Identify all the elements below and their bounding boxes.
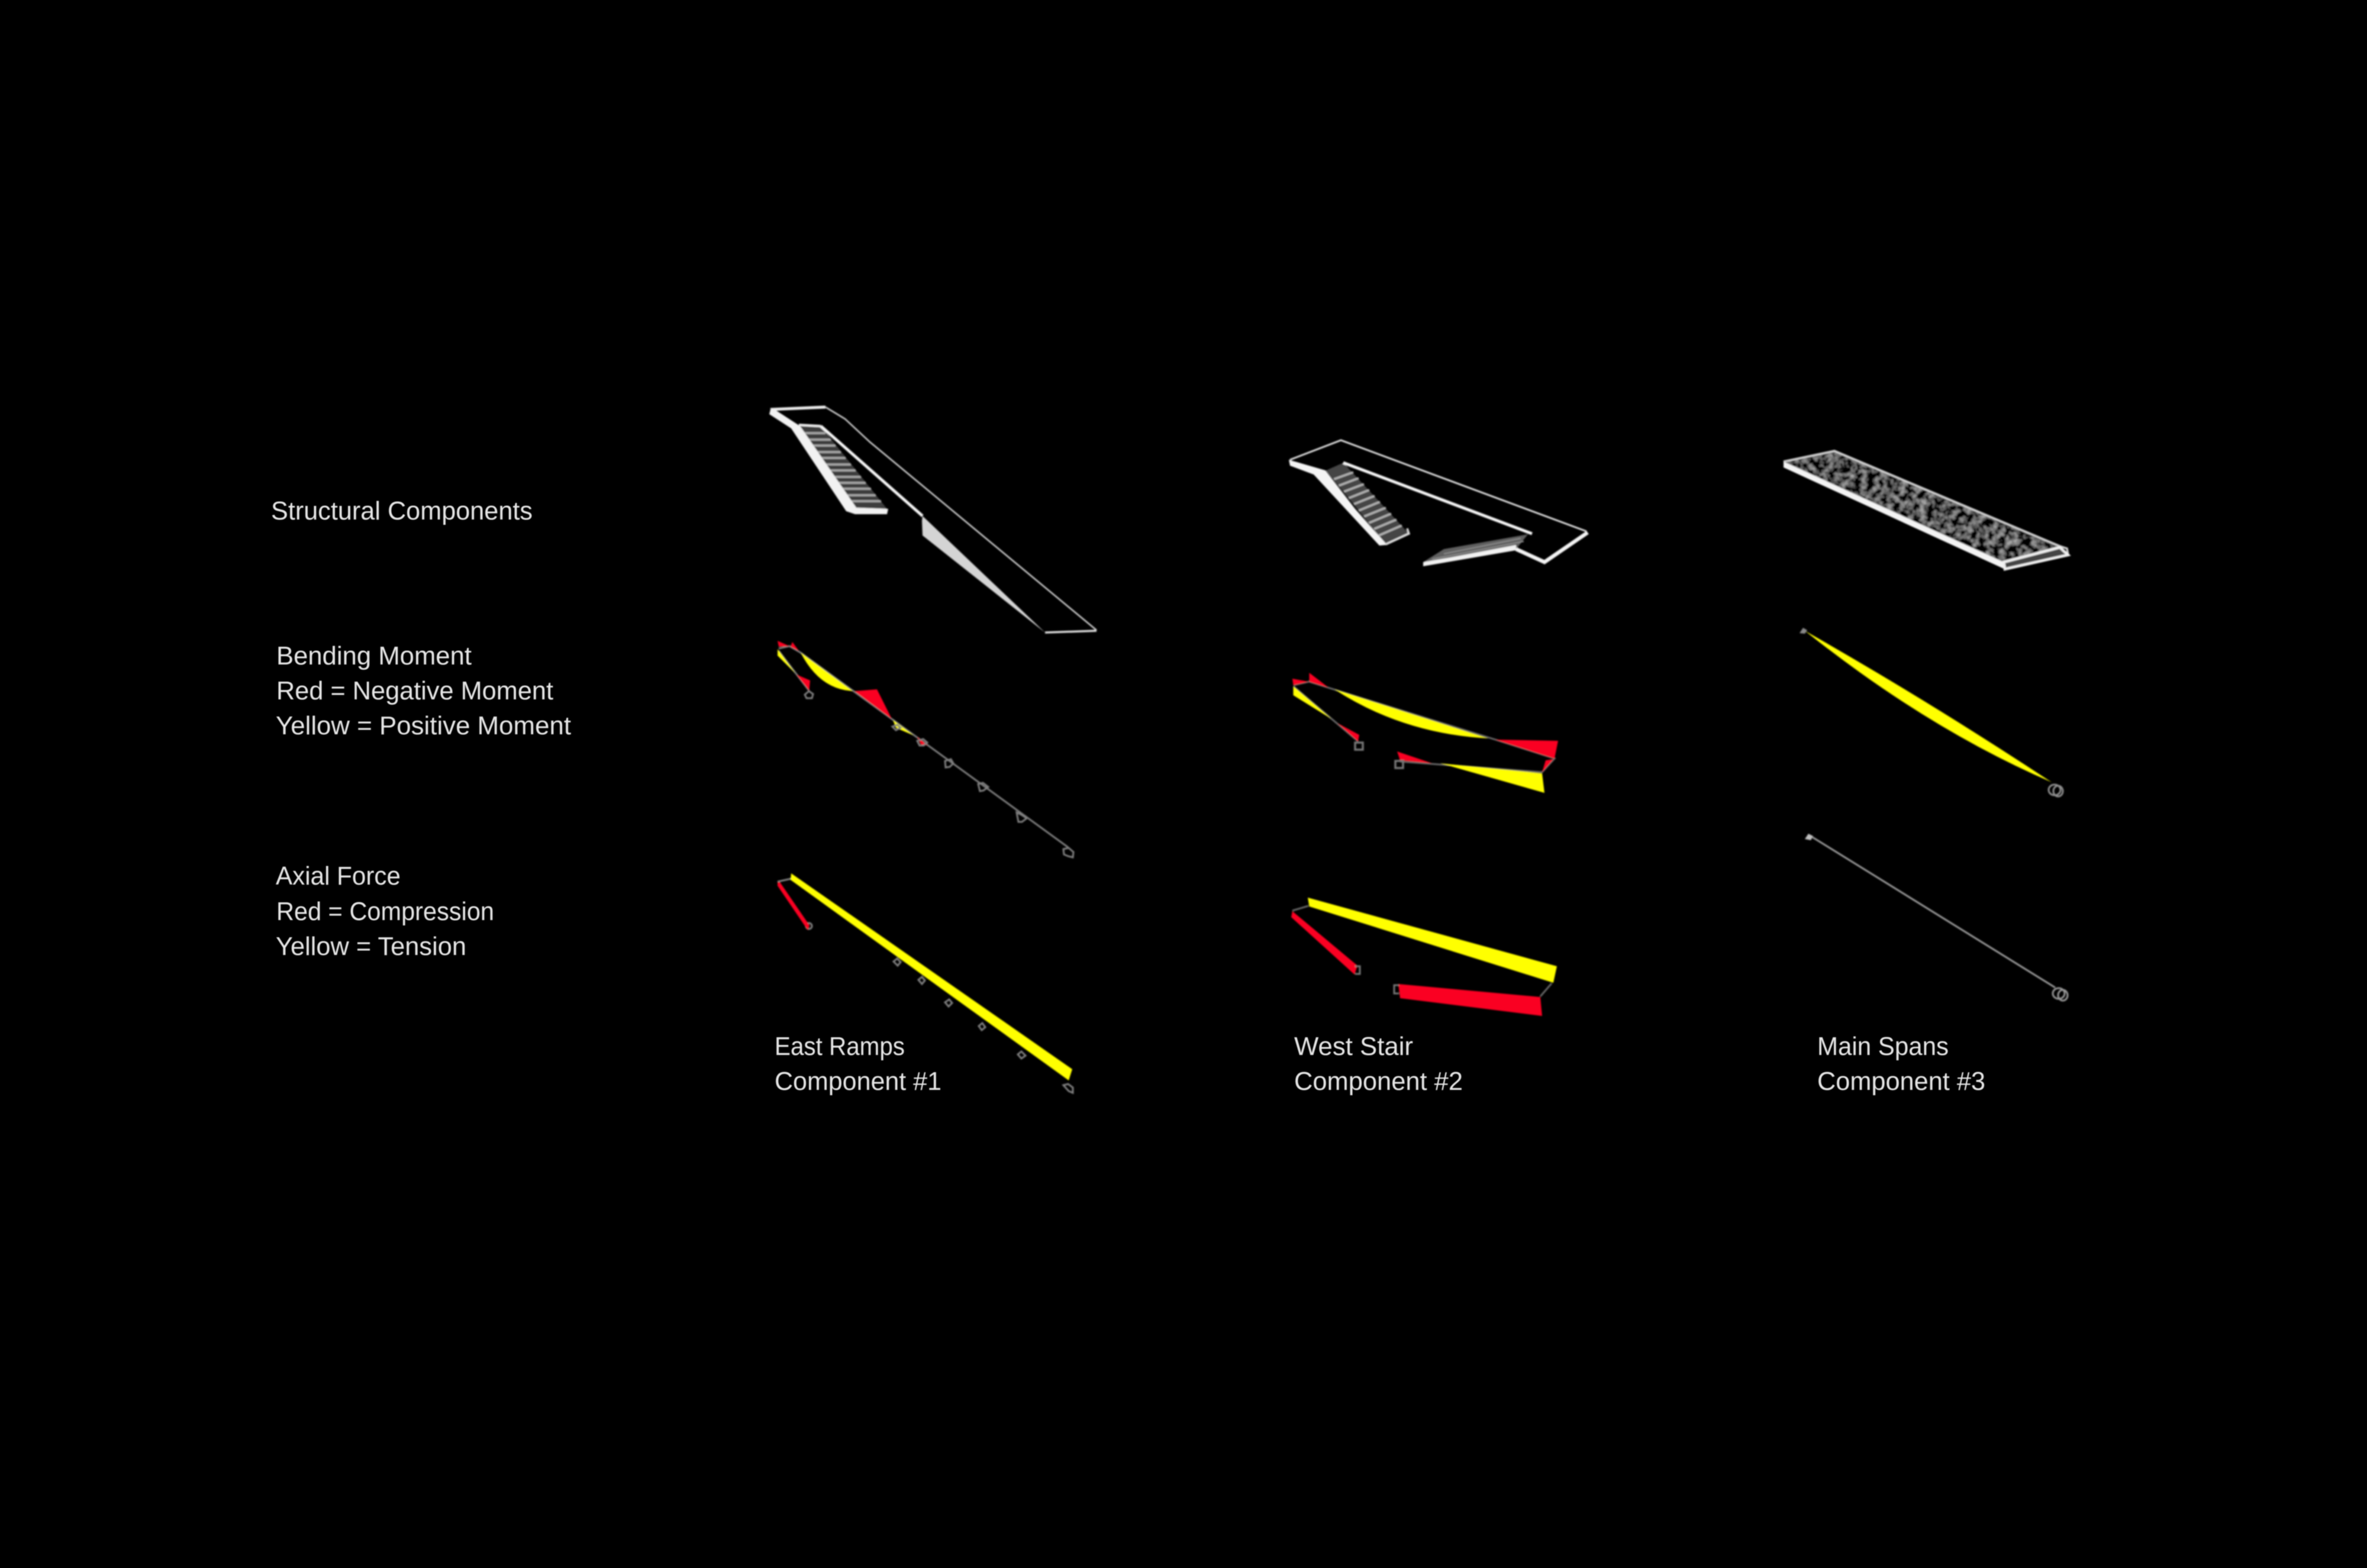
end face bbox=[2004, 547, 2068, 569]
positive moment areas bbox=[1294, 686, 1544, 793]
lower stair bbox=[1423, 534, 1528, 566]
compression bar bbox=[778, 882, 810, 930]
supports bbox=[806, 923, 1073, 1093]
side face bbox=[1784, 462, 2005, 569]
axial force: east ramps bbox=[778, 873, 1073, 1093]
connector bbox=[778, 879, 791, 882]
stair treads bbox=[799, 426, 887, 509]
connectors bbox=[1292, 906, 1552, 996]
caption: west stair bbox=[1294, 1032, 1463, 1096]
frame line bbox=[1294, 682, 1555, 772]
deck surface bbox=[1784, 451, 2060, 562]
label: axial force legend: Red = Compression bbox=[276, 897, 494, 926]
supports bbox=[1805, 834, 1813, 840]
top edges bbox=[1784, 451, 2068, 555]
zero-force line bbox=[1813, 837, 2055, 988]
tapered beam bbox=[922, 516, 1045, 633]
axial force: main spans bbox=[1805, 834, 2068, 1001]
bending moment: east ramps bbox=[778, 641, 1073, 857]
compression bars bbox=[1291, 911, 1542, 1016]
supports bbox=[805, 691, 1073, 857]
bending moment: main spans bbox=[1800, 628, 2063, 796]
axial force: west stair bbox=[1291, 898, 1557, 1016]
label: bending moment legend: Bending Moment bbox=[276, 641, 472, 670]
tension bar bbox=[791, 873, 1072, 1080]
label: bending moment legend: Red = Negative Moment bbox=[276, 676, 553, 705]
supports bbox=[1355, 743, 1403, 768]
ramp edge bbox=[769, 409, 888, 514]
caption: east ramps bbox=[775, 1032, 941, 1096]
stair treads bbox=[1326, 463, 1409, 544]
deck outline bbox=[1290, 440, 1586, 531]
label: axial force legend: Axial Force bbox=[276, 862, 401, 891]
bending moment: west stair bbox=[1292, 673, 1558, 793]
caption: main spans bbox=[1817, 1032, 1985, 1096]
tension bar bbox=[1308, 898, 1557, 983]
label: structural components: Structural Components bbox=[271, 496, 533, 525]
positive moment area bbox=[1805, 631, 2052, 782]
caption: west stair: West Stair bbox=[1294, 1032, 1413, 1061]
caption: main spans: Main Spans bbox=[1817, 1032, 1949, 1061]
caption: west stair: Component #2 bbox=[1294, 1067, 1463, 1096]
caption: east ramps: Component #1 bbox=[775, 1067, 941, 1096]
label: bending moment legend: Yellow = Positive Moment bbox=[276, 711, 571, 740]
label: axial force legend bbox=[276, 862, 494, 961]
row labels bbox=[271, 496, 571, 961]
frame line bbox=[779, 646, 1068, 847]
label: axial force legend: Yellow = Tension bbox=[276, 932, 466, 961]
component 2: west stair isometric drawing bbox=[1289, 440, 1588, 566]
component 1: east ramps isometric drawing bbox=[769, 407, 1097, 633]
inner edge bbox=[821, 426, 923, 516]
column captions bbox=[775, 1032, 1985, 1096]
label: bending moment legend bbox=[276, 641, 571, 740]
supports bbox=[1355, 966, 1399, 993]
component 3: main spans isometric drawing bbox=[1784, 451, 2068, 569]
supports bbox=[1800, 628, 1807, 634]
caption: main spans: Component #3 bbox=[1817, 1067, 1985, 1096]
caption: east ramps: East Ramps bbox=[775, 1032, 905, 1061]
deck outline bbox=[825, 407, 1097, 630]
negative moment areas bbox=[778, 641, 928, 746]
negative moment areas bbox=[1292, 673, 1558, 772]
positive moment areas bbox=[778, 649, 914, 735]
